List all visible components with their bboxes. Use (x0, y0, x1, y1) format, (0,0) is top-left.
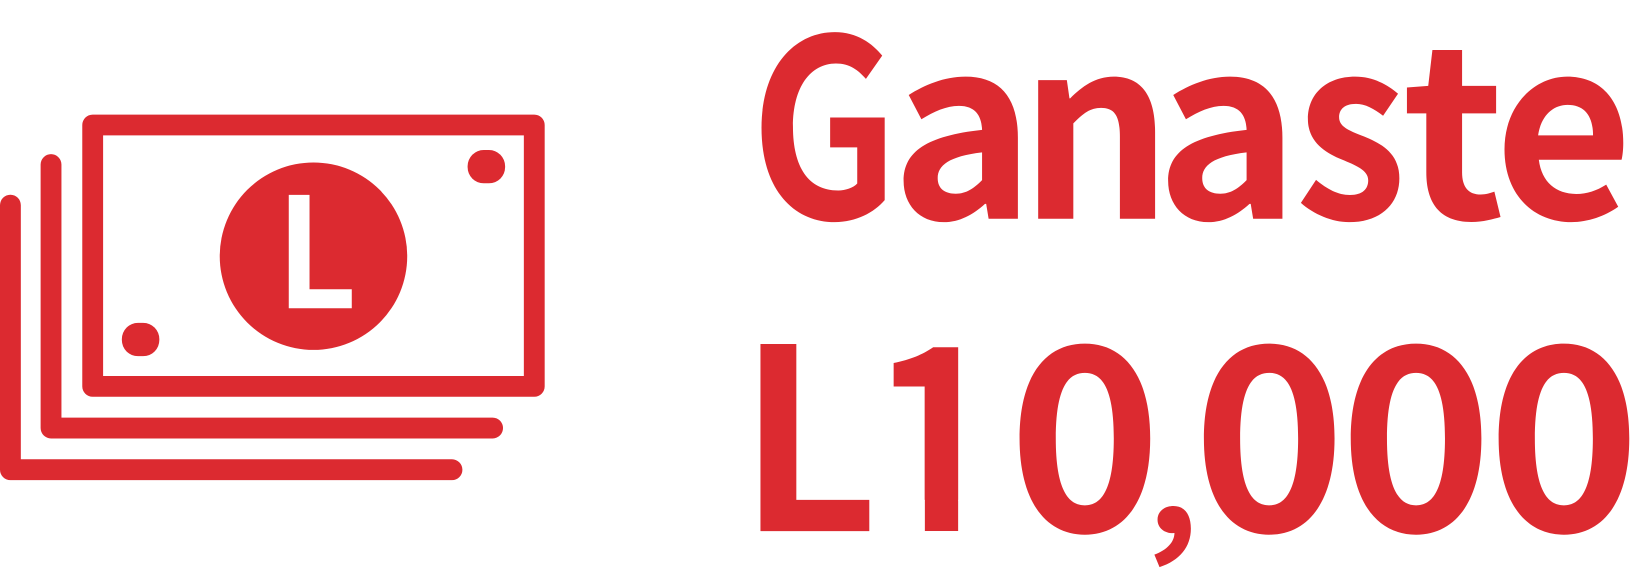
icon: stack of banknotes (10, 125, 534, 470)
banknote bottom left dot (122, 323, 159, 356)
middle banknote edge (51, 165, 493, 428)
back banknote edge (10, 205, 452, 470)
banknote top right dot (468, 150, 505, 183)
coin circle (220, 162, 407, 350)
amount: L10,000: , (1146, 354, 1199, 579)
heading: Ganaste (750, 0, 1633, 291)
amount: L10,000 (760, 344, 1630, 568)
front banknote frame (93, 125, 534, 386)
coin letter L: L (276, 132, 357, 353)
